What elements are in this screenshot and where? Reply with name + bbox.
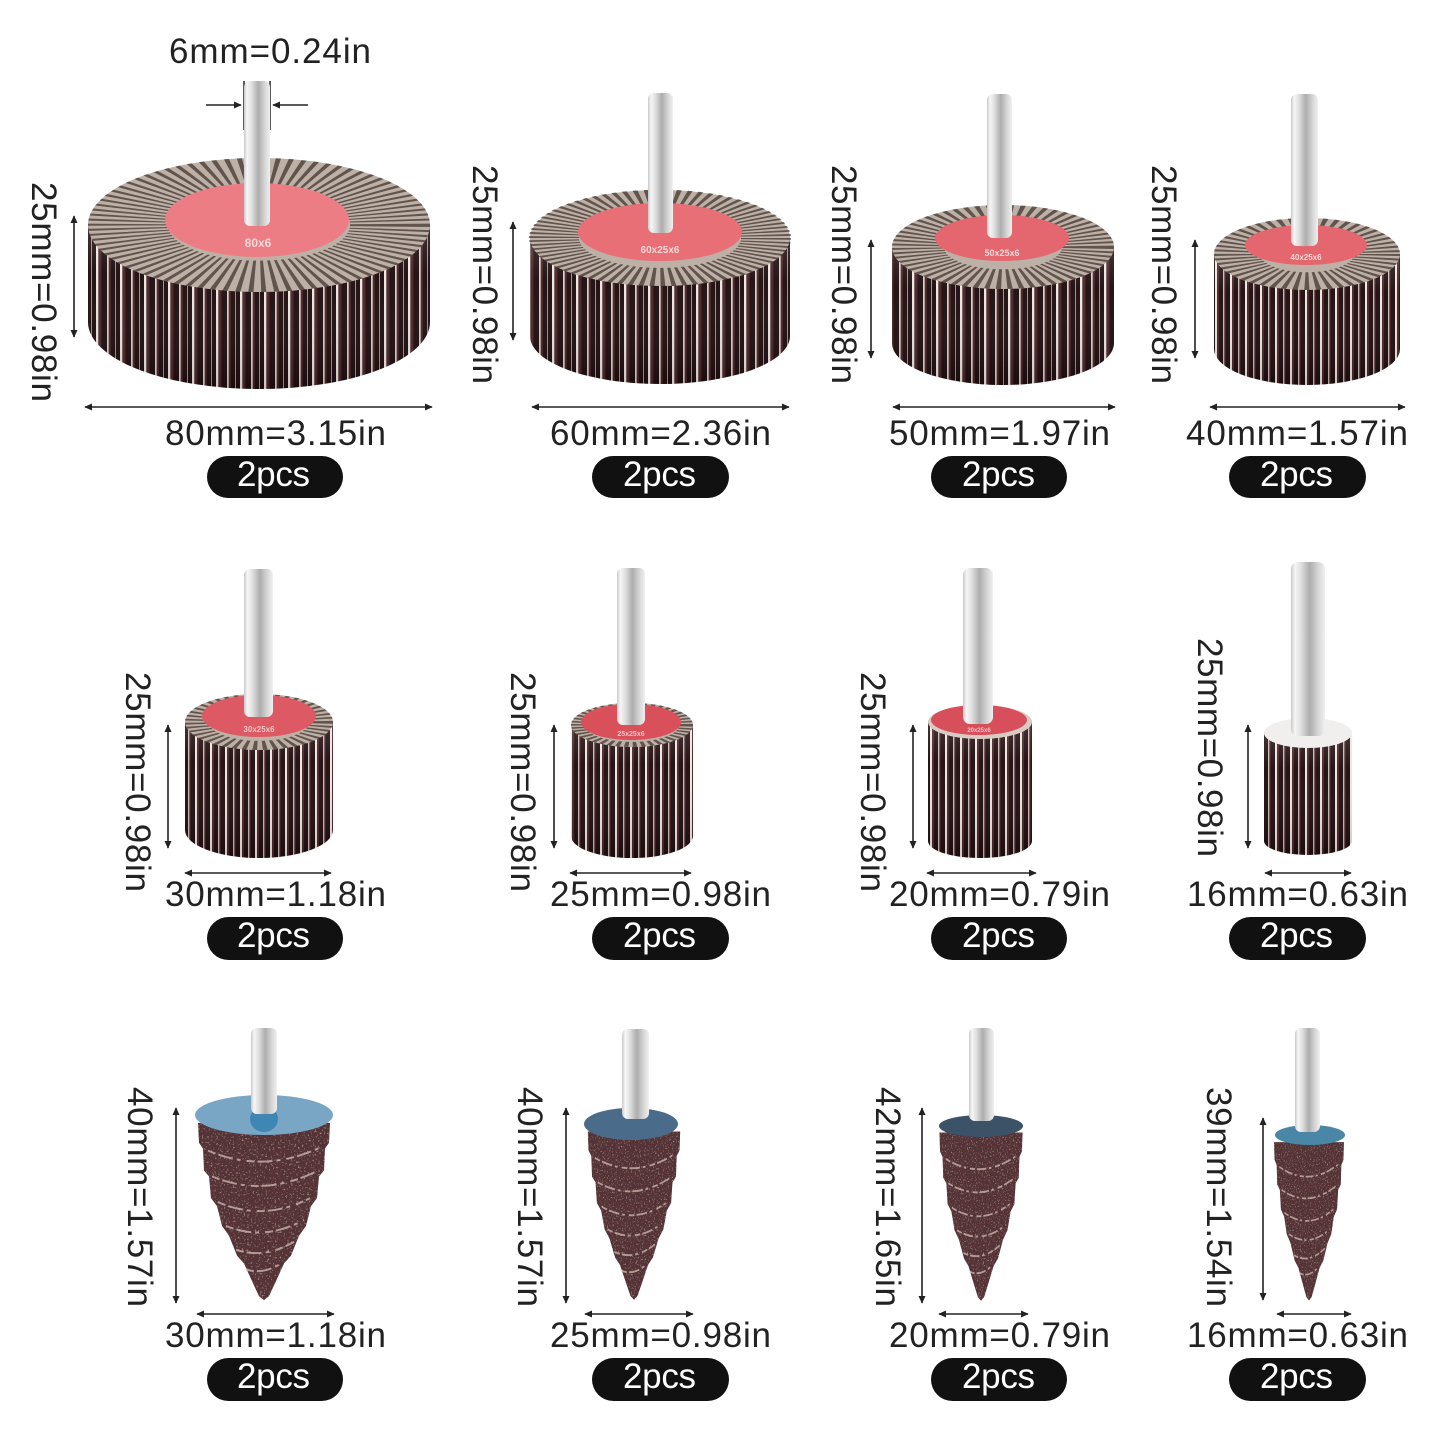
dimension: diameter: 16mm=0.63in — [1187, 875, 1408, 914]
item: 80mm flap wheel — [24, 81, 432, 498]
badge: quantity — [592, 455, 729, 498]
badge: quantity — [592, 916, 729, 960]
dimension: diameter: 60mm=2.36in — [550, 414, 771, 453]
dimension: diameter: 40mm=1.57in — [1186, 414, 1408, 453]
badge: quantity: 2pcs — [237, 1357, 310, 1396]
item: 25mm flap wheel — [503, 568, 771, 960]
badge: quantity: 2pcs — [1260, 1357, 1333, 1396]
badge: quantity — [931, 455, 1067, 498]
dimension: height: 25mm=0.98in — [824, 165, 863, 384]
flap wheel body: 20x25x6 — [967, 728, 991, 734]
item: 30mm cone — [120, 1028, 386, 1401]
dimension: diameter: 25mm=0.98in — [550, 1316, 771, 1355]
item: 30mm flap wheel — [118, 569, 386, 960]
badge: quantity — [931, 1357, 1067, 1401]
dimension: diameter: 25mm=0.98in — [550, 875, 771, 914]
dimension: diameter: 30mm=1.18in — [165, 1316, 386, 1355]
badge: quantity: 2pcs — [237, 916, 310, 955]
badge: quantity: 2pcs — [237, 455, 310, 494]
item: 60mm flap wheel — [465, 93, 790, 498]
badge: quantity — [207, 916, 343, 960]
dimension: height: 40mm=1.57in — [120, 1087, 159, 1307]
flap wheel body — [185, 569, 333, 858]
flap wheel body — [1264, 562, 1352, 855]
flap wheel body — [530, 93, 790, 384]
dimension: diameter: 80mm=3.15in — [165, 414, 386, 453]
flap wheel body — [928, 568, 1032, 858]
label: shaft diameter: 6mm=0.24in — [169, 32, 371, 71]
dimension: height: 25mm=0.98in — [24, 182, 63, 402]
dimension: diameter: 50mm=1.97in — [889, 414, 1110, 453]
dimension: height: 25mm=0.98in — [118, 672, 157, 892]
item: 20mm cone — [868, 1028, 1110, 1401]
flap wheel body — [892, 94, 1114, 385]
item: 20mm flap wheel — [853, 568, 1110, 960]
dimension: diameter: 20mm=0.79in — [889, 875, 1110, 914]
flap wheel body: 60x25x6 — [641, 245, 680, 256]
dimension: height: 39mm=1.54in — [1199, 1087, 1238, 1307]
badge: quantity — [1229, 1357, 1366, 1401]
flap wheel body: 80x6 — [245, 236, 272, 250]
dimension: height: 42mm=1.65in — [868, 1087, 907, 1307]
flap wheel body — [88, 81, 430, 389]
item: 16mm cone — [1187, 1028, 1408, 1401]
badge: quantity: 2pcs — [962, 455, 1035, 494]
flap wheel body: 40x25x6 — [1290, 253, 1322, 262]
badge: quantity — [1229, 455, 1366, 498]
cone body — [939, 1028, 1023, 1301]
cone body — [195, 1028, 333, 1300]
flap wheel body: 30x25x6 — [243, 725, 275, 734]
item: 50mm flap wheel — [824, 94, 1115, 498]
badge: quantity: 2pcs — [1260, 916, 1333, 955]
item: 40mm flap wheel — [1144, 94, 1408, 498]
dimension: height: 40mm=1.57in — [510, 1087, 549, 1307]
badge: quantity — [931, 916, 1067, 960]
badge: quantity — [207, 455, 343, 498]
item: 16mm flap wheel — [1187, 562, 1408, 960]
cone body — [1274, 1028, 1345, 1300]
badge: quantity — [1229, 916, 1366, 960]
cone body — [584, 1029, 680, 1300]
badge: quantity — [207, 1357, 343, 1401]
badge: quantity: 2pcs — [1260, 455, 1333, 494]
dimension: height: 25mm=0.98in — [503, 672, 542, 892]
dimension: diameter: 20mm=0.79in — [889, 1316, 1110, 1355]
flap wheel body — [571, 568, 693, 858]
badge: quantity: 2pcs — [962, 1357, 1035, 1396]
dimension: diameter: 16mm=0.63in — [1187, 1316, 1408, 1355]
dimension: height: 25mm=0.98in — [465, 165, 504, 384]
dimension: height: 25mm=0.98in — [1190, 638, 1229, 857]
badge: quantity: 2pcs — [962, 916, 1035, 955]
badge: quantity: 2pcs — [623, 916, 696, 955]
badge: quantity: 2pcs — [623, 455, 696, 494]
dimension: diameter: 30mm=1.18in — [165, 875, 386, 914]
item: 25mm cone — [510, 1029, 771, 1401]
dimension: height: 25mm=0.98in — [853, 672, 892, 892]
flap wheel body: 50x25x6 — [984, 248, 1020, 258]
dimension: height: 25mm=0.98in — [1144, 165, 1183, 384]
badge: quantity: 2pcs — [623, 1357, 696, 1396]
flap wheel body: 25x25x6 — [617, 731, 645, 738]
flap wheel body — [1214, 94, 1400, 385]
badge: quantity — [592, 1357, 729, 1401]
